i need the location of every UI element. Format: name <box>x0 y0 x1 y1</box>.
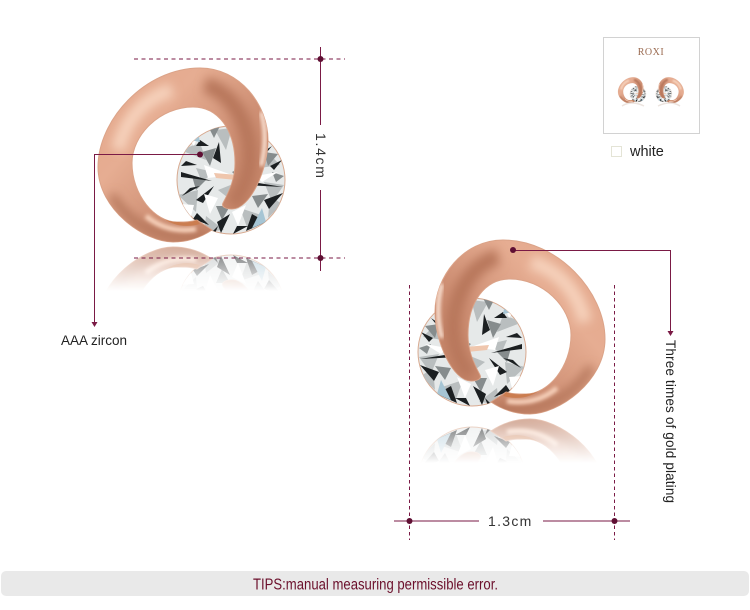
colour swatch thumbnail <box>604 38 700 134</box>
callout: AAA zircon: AAA zircon <box>61 333 127 348</box>
brand name: ROXI <box>638 47 664 58</box>
callout: gold plating: Three times of gold plating <box>663 340 678 503</box>
colour option: white <box>612 144 664 160</box>
thumbnail earrings <box>618 77 684 106</box>
earring: right view <box>418 240 605 414</box>
width dimension: 1.3cm: 1.3cm <box>488 513 533 529</box>
height dimension: 1.4cm <box>134 47 345 271</box>
tips bar <box>1 571 749 596</box>
callout: AAA zircon <box>61 152 203 348</box>
earring: left view <box>98 68 285 242</box>
tips bar: TIPS:manual measuring permissible error. <box>253 576 498 594</box>
width dimension: 1.3cm <box>394 285 630 540</box>
reflection: right earring <box>423 418 594 460</box>
height dimension: 1.4cm: 1.4cm <box>313 133 329 180</box>
callout: gold plating <box>510 247 678 503</box>
colour option: white: white <box>629 144 664 160</box>
reflection: left earring <box>110 246 280 288</box>
